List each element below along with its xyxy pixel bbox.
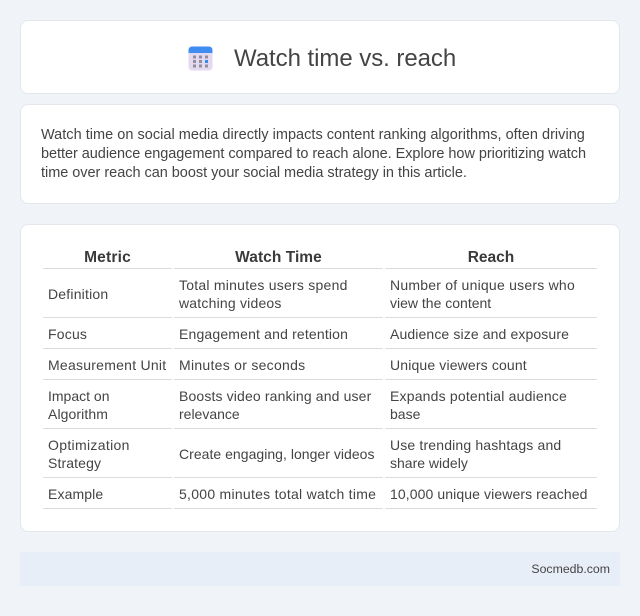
footer bar (20, 552, 620, 586)
header: Reach: Reach (468, 249, 514, 266)
row: Optimization Strategy: Use trending hashtags and (390, 437, 561, 453)
row: Focus: Focus (48, 326, 87, 342)
row: Impact on Algorithm: base (390, 406, 420, 422)
row: Focus (48, 326, 569, 342)
row: Optimization Strategy: Optimization (48, 437, 130, 453)
intro text: better audience engagement compared to reach alone. Explore how prioritizing watch (41, 146, 586, 162)
row: Impact on Algorithm: relevance (179, 406, 240, 422)
intro text: Watch time on social media directly impacts content ranking algorithms, often driving (41, 127, 585, 143)
row: Optimization Strategy: Strategy (48, 455, 101, 471)
row: Definition: Total minutes users spend (179, 277, 348, 293)
row: Measurement Unit: Measurement Unit (48, 357, 166, 373)
row: Focus: Audience size and exposure (390, 326, 569, 342)
row: Definition: Definition (48, 286, 108, 302)
row: Impact on Algorithm: Expands potential audience (390, 388, 567, 404)
row: Impact on Algorithm: Impact on (48, 388, 109, 404)
footer text: Socmedb.com (531, 562, 610, 576)
panel: comparison table (20, 224, 620, 532)
table header (84, 249, 514, 266)
row: Example: 5,000 minutes total watch time (179, 486, 376, 502)
row: Impact on Algorithm: Algorithm (48, 406, 108, 422)
header: Watch Time: Watch Time (235, 249, 322, 266)
row: Example: Example (48, 486, 103, 502)
row: Definition (48, 277, 575, 311)
row: Example: 10,000 unique viewers reached (390, 486, 587, 502)
row: Measurement Unit (48, 357, 527, 373)
intro text: time over reach can boost your social media strategy in this article. (41, 165, 467, 181)
row: Optimization Strategy: Create engaging, longer videos (179, 446, 374, 462)
panel: title (20, 20, 620, 94)
title text: Watch time vs. reach (234, 45, 456, 72)
row: Measurement Unit: Minutes or seconds (179, 357, 305, 373)
row: Focus: Engagement and retention (179, 326, 348, 342)
row: Example (48, 486, 587, 502)
row: Impact on Algorithm: Boosts video ranking and user (179, 388, 371, 404)
row: Definition: Number of unique users who (390, 277, 575, 293)
row: Definition: view the content (390, 295, 491, 311)
panel: introduction (20, 104, 620, 204)
row: Impact on Algorithm (48, 388, 567, 422)
header: Metric: Metric (84, 249, 131, 266)
row: Measurement Unit: Unique viewers count (390, 357, 527, 373)
row: Optimization Strategy (48, 437, 561, 471)
row: Definition: watching videos (179, 295, 282, 311)
row: Optimization Strategy: share widely (390, 455, 468, 471)
icon: calendar (188, 46, 212, 70)
intro text (41, 127, 586, 181)
